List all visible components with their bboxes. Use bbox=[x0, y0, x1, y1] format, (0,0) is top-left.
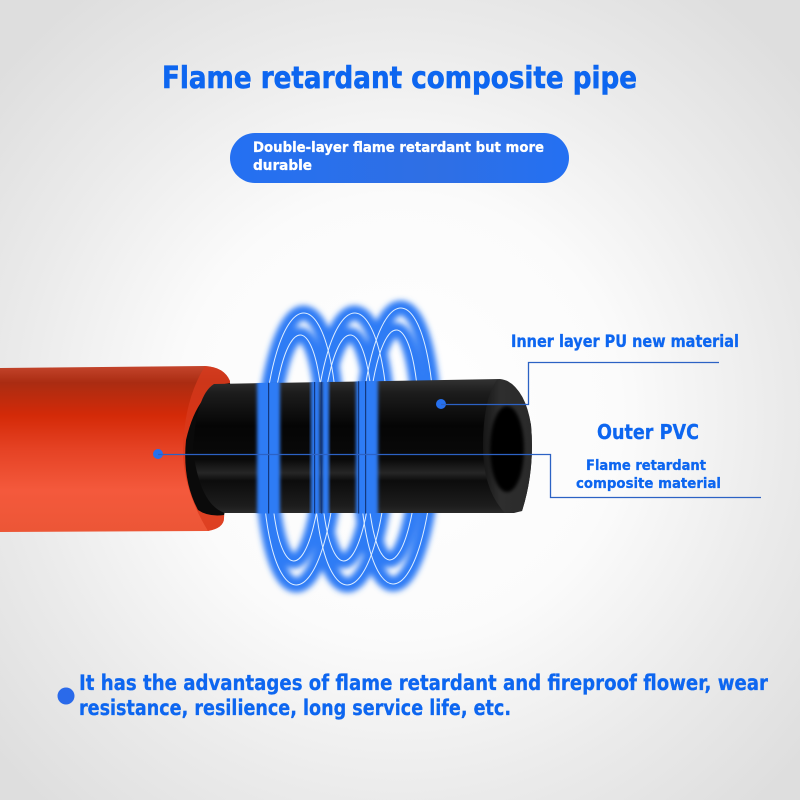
bullet note bbox=[58, 671, 768, 721]
subtitle pill: Double-layer flame retardant but more bbox=[253, 140, 544, 156]
pipe: black inner PU bbox=[193, 379, 532, 513]
pipe: red outer PVC bbox=[0, 366, 230, 532]
callout: inner layer: Inner layer PU new material bbox=[511, 332, 739, 351]
pipe end face bbox=[483, 380, 532, 513]
bullet note: resistance, resilience, long service life, etc. bbox=[79, 696, 511, 721]
callout: outer PVC: composite material bbox=[576, 476, 721, 492]
subtitle pill bbox=[230, 133, 569, 183]
pipe opening bbox=[185, 383, 240, 515]
rings in front of the pipe bbox=[257, 375, 378, 520]
callout: outer PVC: Flame retardant bbox=[586, 458, 706, 474]
subtitle pill: durable bbox=[253, 158, 312, 174]
rings behind the pipe bbox=[259, 307, 438, 586]
pipe bore bbox=[490, 406, 524, 492]
callout: outer PVC bbox=[153, 420, 761, 498]
callout: inner layer bbox=[436, 332, 739, 409]
red lip shading bbox=[183, 366, 230, 531]
callout: outer PVC: Outer PVC bbox=[597, 420, 699, 444]
title: Flame retardant composite pipe bbox=[162, 61, 637, 96]
